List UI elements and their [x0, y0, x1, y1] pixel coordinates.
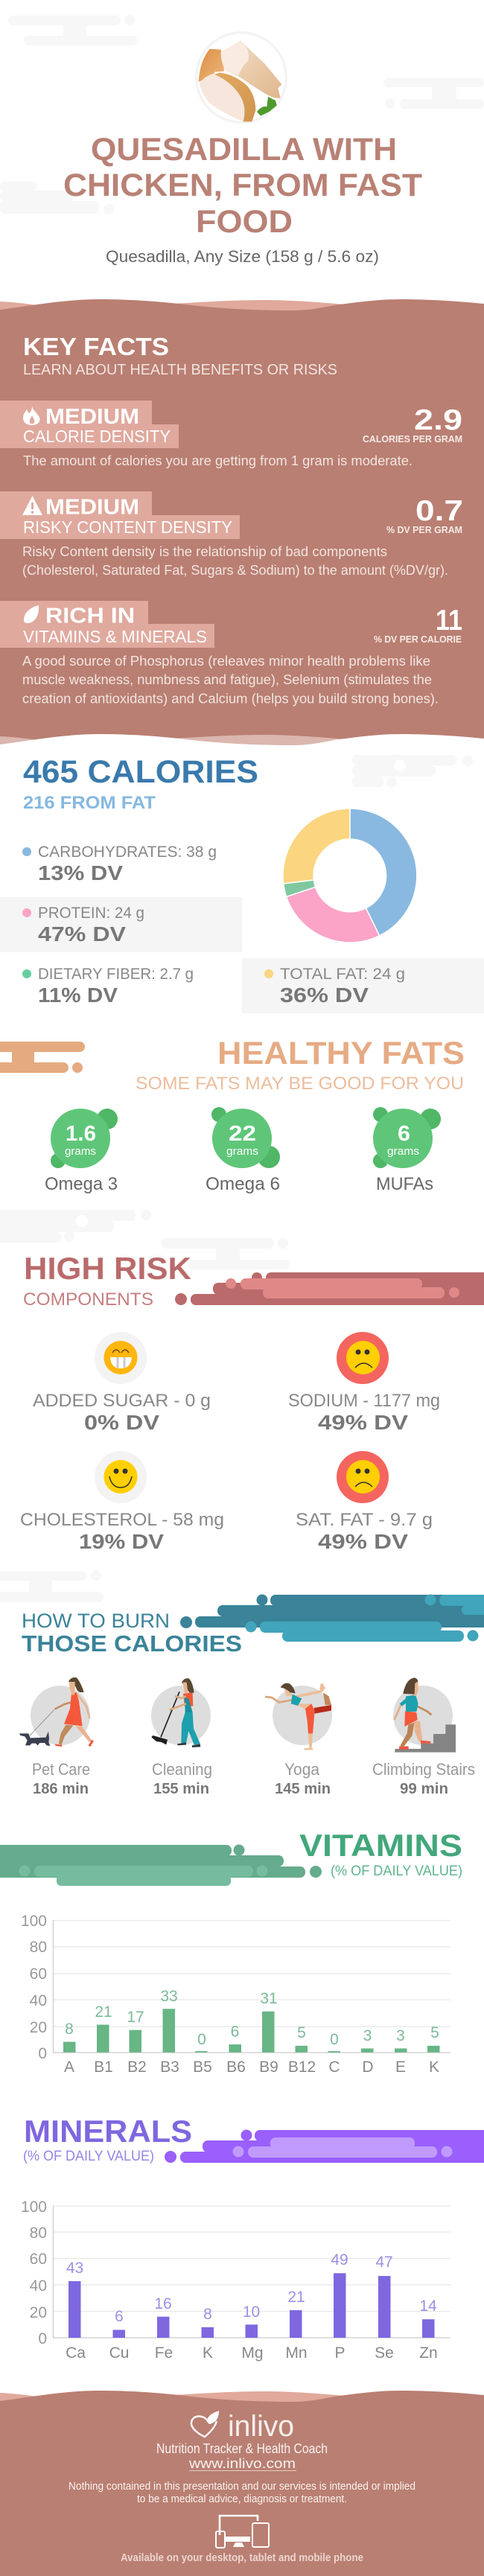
icon: grinning face [104, 1341, 137, 1374]
value labels: 21 [287, 2289, 305, 2306]
availability note: Available on your desktop, tablet and mobile phone [121, 2551, 363, 2564]
value labels: 14 [419, 2298, 437, 2315]
x axis labels [66, 2344, 438, 2362]
fact: rich in vitamins and minerals: creation of antioxidants) and Calcium (helps you build strong bones). [22, 691, 439, 706]
stat: omega 6: Omega 6 [206, 1174, 280, 1194]
chart: minerals bar chart [21, 2199, 450, 2362]
value labels: 3 [396, 2027, 405, 2044]
panel: footer [0, 2391, 484, 2576]
value labels: 8 [203, 2306, 212, 2323]
x axis labels: B12 [288, 2059, 316, 2076]
activity: cleaning: Cleaning [152, 1760, 212, 1779]
x axis labels: Mg [241, 2344, 264, 2362]
tagline and website: Nutrition Tracker & Health Coach [156, 2441, 328, 2456]
heading: vitamins: VITAMINS [299, 1828, 462, 1863]
heading: key facts [23, 333, 337, 378]
heading: minerals [23, 2114, 192, 2164]
fact: rich in vitamins and minerals: A good source of Phosphorus (releaves minor health problems like [22, 654, 430, 669]
x axis labels: Fe [155, 2344, 173, 2362]
heading: healthy fats [136, 1036, 465, 1094]
stat: omega 6: grams [226, 1145, 258, 1158]
decorative shape: high risk [175, 1272, 484, 1305]
legend: protein [22, 905, 144, 946]
background cloud: how to burn [0, 1570, 104, 1602]
bars [63, 2009, 439, 2053]
activity: cleaning: 155 min [153, 1781, 209, 1797]
fact: rich in vitamins and minerals: RICH IN [45, 605, 135, 628]
icon: smiling face [104, 1460, 137, 1493]
stat: MUFAs: 6 [398, 1122, 410, 1146]
legend: dietary fiber: DIETARY FIBER: 2.7 g [38, 966, 194, 983]
value labels: 0 [197, 2031, 206, 2048]
fact: risky content density: RISKY CONTENT DENSITY [23, 517, 232, 537]
fact: risky content density: 0.7 [415, 495, 463, 527]
activity: cleaning [151, 1678, 212, 1797]
x axis labels [64, 2059, 439, 2076]
y axis labels: 20 [30, 2304, 47, 2321]
title: CHICKEN, FROM FAST [63, 168, 422, 203]
bars [69, 2273, 435, 2338]
icon: sad face [346, 1460, 380, 1493]
risk: saturated fat: SAT. FAT - 9.7 g [296, 1510, 433, 1530]
icon: sad face [346, 1341, 380, 1374]
x axis labels: B5 [193, 2059, 212, 2076]
y axis labels [21, 1913, 47, 2062]
panel: macro highlight rows [0, 897, 484, 1013]
x axis labels: B9 [259, 2059, 278, 2076]
stat: omega 3: 1.6 [66, 1122, 96, 1146]
subtitle: serving size: Quesadilla, Any Size (158 g / 5.6 oz) [106, 247, 379, 266]
legend: dietary fiber [22, 966, 194, 1007]
x axis labels: Mn [285, 2344, 308, 2362]
fact: rich in vitamins and minerals [0, 601, 462, 706]
risk: added sugar: 0% DV [84, 1411, 159, 1434]
stat: omega 3 [45, 1109, 118, 1194]
decorative shape: healthy fats [0, 1042, 85, 1073]
heading: vitamins: (% OF DAILY VALUE) [331, 1864, 462, 1879]
icon: warning triangle [22, 496, 42, 515]
fact: risky content density [0, 491, 463, 578]
value labels [65, 1988, 439, 2048]
legend: protein: 47% DV [38, 922, 126, 946]
value labels: 10 [243, 2304, 260, 2321]
stat: MUFAs [373, 1107, 441, 1194]
decorative shape: how to burn [180, 1595, 484, 1642]
heading: high risk components: COMPONENTS [23, 1289, 153, 1310]
stat: omega 3: Omega 3 [45, 1174, 118, 1194]
legend: dietary fiber: 11% DV [38, 983, 118, 1007]
fact: calorie density [0, 401, 462, 468]
activity: climbing stairs [372, 1677, 475, 1797]
legend: protein: PROTEIN: 24 g [38, 905, 144, 922]
icon: woman climbing stairs [393, 1677, 456, 1753]
x axis labels: Cu [109, 2344, 129, 2362]
disclaimer: Nothing contained in this presentation and our services is intended or implied [69, 2480, 415, 2493]
value labels: 6 [231, 2024, 239, 2040]
x axis labels: Ca [66, 2344, 86, 2362]
fact: rich in vitamins and minerals: VITAMINS & MINERALS [23, 627, 207, 646]
food image: chicken breast [197, 33, 286, 122]
y axis labels [21, 2199, 47, 2347]
y axis labels: 80 [30, 1939, 47, 1956]
stat: MUFAs: MUFAs [376, 1174, 433, 1194]
risk: saturated fat: 49% DV [318, 1530, 408, 1553]
y axis labels: 40 [30, 1992, 47, 2009]
legend: total fat: TOTAL FAT: 24 g [280, 966, 405, 983]
value labels: 33 [160, 1988, 178, 2005]
risk: sodium [288, 1332, 440, 1434]
heading: how to burn those calories [22, 1610, 242, 1657]
risk: sodium: 49% DV [318, 1411, 408, 1434]
disclaimer [69, 2480, 415, 2505]
y axis labels: 0 [38, 2045, 47, 2062]
fact: rich in vitamins and minerals: % DV PER CALORIE [374, 634, 462, 645]
fact: calorie density: CALORIE DENSITY [23, 427, 171, 446]
x axis labels: B2 [127, 2059, 147, 2076]
fact: rich in vitamins and minerals: muscle weakness, numbness and fatigue), Selenium (stimulates the [22, 672, 432, 687]
x axis labels: B3 [160, 2059, 179, 2076]
y axis labels: 100 [21, 2199, 47, 2216]
risk: cholesterol: CHOLESTEROL - 58 mg [20, 1510, 224, 1530]
heading: key facts: LEARN ABOUT HEALTH BENEFITS OR RISKS [23, 361, 337, 378]
stat: MUFAs: grams [387, 1145, 419, 1158]
value labels: 16 [154, 2295, 172, 2312]
y axis labels: 60 [30, 1966, 47, 1983]
activity: yoga: 145 min [275, 1781, 331, 1797]
heading: healthy fats: SOME FATS MAY BE GOOD FOR YOU [136, 1074, 464, 1094]
panel: key facts [0, 299, 484, 750]
fact: calorie density: CALORIES PER GRAM [363, 433, 462, 444]
fact: calorie density: 2.9 [414, 404, 462, 436]
activity: climbing stairs: Climbing Stairs [372, 1760, 475, 1779]
risk: added sugar: ADDED SUGAR - 0 g [33, 1391, 211, 1411]
decorative shape: vitamins [0, 1845, 322, 1886]
y axis labels: 0 [38, 2330, 47, 2347]
icon: woman in yoga pose [265, 1683, 332, 1750]
value labels: 8 [65, 2021, 74, 2038]
legend: carbohydrates: CARBOHYDRATES: 38 g [38, 844, 217, 861]
icon: leaf [24, 605, 39, 623]
x axis labels: C [328, 2059, 340, 2076]
fact: risky content density: MEDIUM [45, 496, 139, 520]
legend: total fat [264, 966, 405, 1007]
stat: omega 6 [206, 1107, 280, 1194]
legend: total fat: 36% DV [280, 983, 369, 1007]
heading: healthy fats: HEALTHY FATS [217, 1036, 465, 1071]
fact: calorie density: The amount of calories you are getting from 1 gram is moderate. [23, 453, 413, 468]
heading: 465 calories: 216 FROM FAT [23, 793, 156, 813]
legend: carbohydrates: 13% DV [38, 861, 123, 884]
icon: woman walking dog [19, 1677, 94, 1747]
background cloud: calories [352, 755, 473, 788]
heading: vitamins [299, 1828, 462, 1879]
heading: 465 calories: 465 CALORIES [23, 754, 258, 790]
y axis labels: 100 [21, 1913, 47, 1930]
value labels: 6 [115, 2308, 124, 2325]
y axis labels: 40 [30, 2277, 47, 2295]
heading: minerals: (% OF DAILY VALUE) [23, 2149, 154, 2164]
stat: omega 3: grams [65, 1145, 96, 1158]
x axis labels: B6 [226, 2059, 246, 2076]
icon: flame [23, 406, 39, 425]
background clouds: high risk [0, 1210, 290, 1269]
x axis labels: E [395, 2059, 406, 2076]
x axis labels: K [429, 2059, 439, 2076]
x axis labels: K [203, 2344, 213, 2362]
disclaimer: to be a medical advice, diagnosis or treatment. [137, 2493, 347, 2505]
value labels: 5 [430, 2024, 439, 2041]
logo: inlivo: inlivo [228, 2410, 294, 2443]
risk: cholesterol [20, 1451, 224, 1553]
value labels: 17 [127, 2009, 144, 2026]
x axis labels: B1 [94, 2059, 113, 2076]
legend: carbohydrates [22, 844, 217, 884]
x axis labels: P [334, 2344, 346, 2362]
activity: climbing stairs: 99 min [400, 1781, 448, 1797]
title: FOOD [196, 204, 293, 240]
y axis labels: 20 [30, 2019, 47, 2036]
heading: how to burn those calories: THOSE CALORIES [22, 1630, 242, 1657]
risk: sodium: SODIUM - 1177 mg [288, 1391, 440, 1411]
heading: high risk components: HIGH RISK [24, 1251, 191, 1286]
risk: added sugar [33, 1332, 211, 1434]
fact: risky content density: (Cholesterol, Saturated Fat, Sugars & Sodium) to the amount (%DV/gr). [22, 563, 448, 578]
value labels: 5 [297, 2024, 306, 2041]
tagline and website [156, 2441, 328, 2471]
fact: rich in vitamins and minerals: 11 [436, 605, 462, 637]
value labels: 47 [375, 2254, 393, 2271]
x axis labels: A [64, 2059, 74, 2076]
fact: calorie density: MEDIUM [45, 405, 139, 429]
title: QUESADILLA WITH [91, 132, 397, 168]
activity: pet care: Pet Care [32, 1760, 90, 1779]
value labels: 49 [331, 2251, 348, 2269]
decorative shape: minerals [165, 2129, 484, 2163]
activity: pet care: 186 min [33, 1781, 89, 1797]
x axis labels: Se [375, 2344, 394, 2362]
background clouds: header [0, 15, 484, 214]
y axis labels: 80 [30, 2225, 47, 2242]
activity: yoga: Yoga [284, 1760, 320, 1779]
y axis labels: 60 [30, 2251, 47, 2268]
risk: cholesterol: 19% DV [79, 1530, 164, 1553]
value labels: 21 [95, 2003, 112, 2021]
icon: devices [216, 2516, 269, 2548]
chart: vitamins bar chart [21, 1913, 450, 2076]
activity: pet care [19, 1677, 94, 1797]
value labels [66, 2251, 437, 2325]
heading: minerals: MINERALS [24, 2114, 192, 2149]
heading: high risk components [23, 1251, 191, 1310]
heading: 465 calories [23, 754, 258, 813]
tagline and website: www.inlivo.com [188, 2456, 296, 2471]
value labels: 3 [363, 2027, 372, 2044]
x axis labels: Zn [419, 2344, 438, 2362]
icon: woman sweeping [151, 1678, 211, 1747]
title [63, 132, 422, 240]
fact: risky content density: % DV PER GRAM [386, 524, 462, 535]
activity: yoga [265, 1683, 332, 1797]
x axis labels: D [362, 2059, 374, 2076]
value labels: 43 [66, 2260, 83, 2277]
heading: how to burn those calories: HOW TO BURN [22, 1610, 170, 1632]
stat: omega 6: 22 [229, 1122, 256, 1146]
fact: risky content density: Risky Content density is the relationship of bad components [22, 544, 387, 559]
risk: saturated fat [296, 1451, 433, 1553]
value labels: 31 [260, 1990, 278, 2007]
heading: key facts: KEY FACTS [23, 333, 169, 360]
chart: macronutrient donut [283, 809, 417, 943]
value labels: 0 [330, 2031, 339, 2048]
logo: inlivo [191, 2410, 294, 2443]
